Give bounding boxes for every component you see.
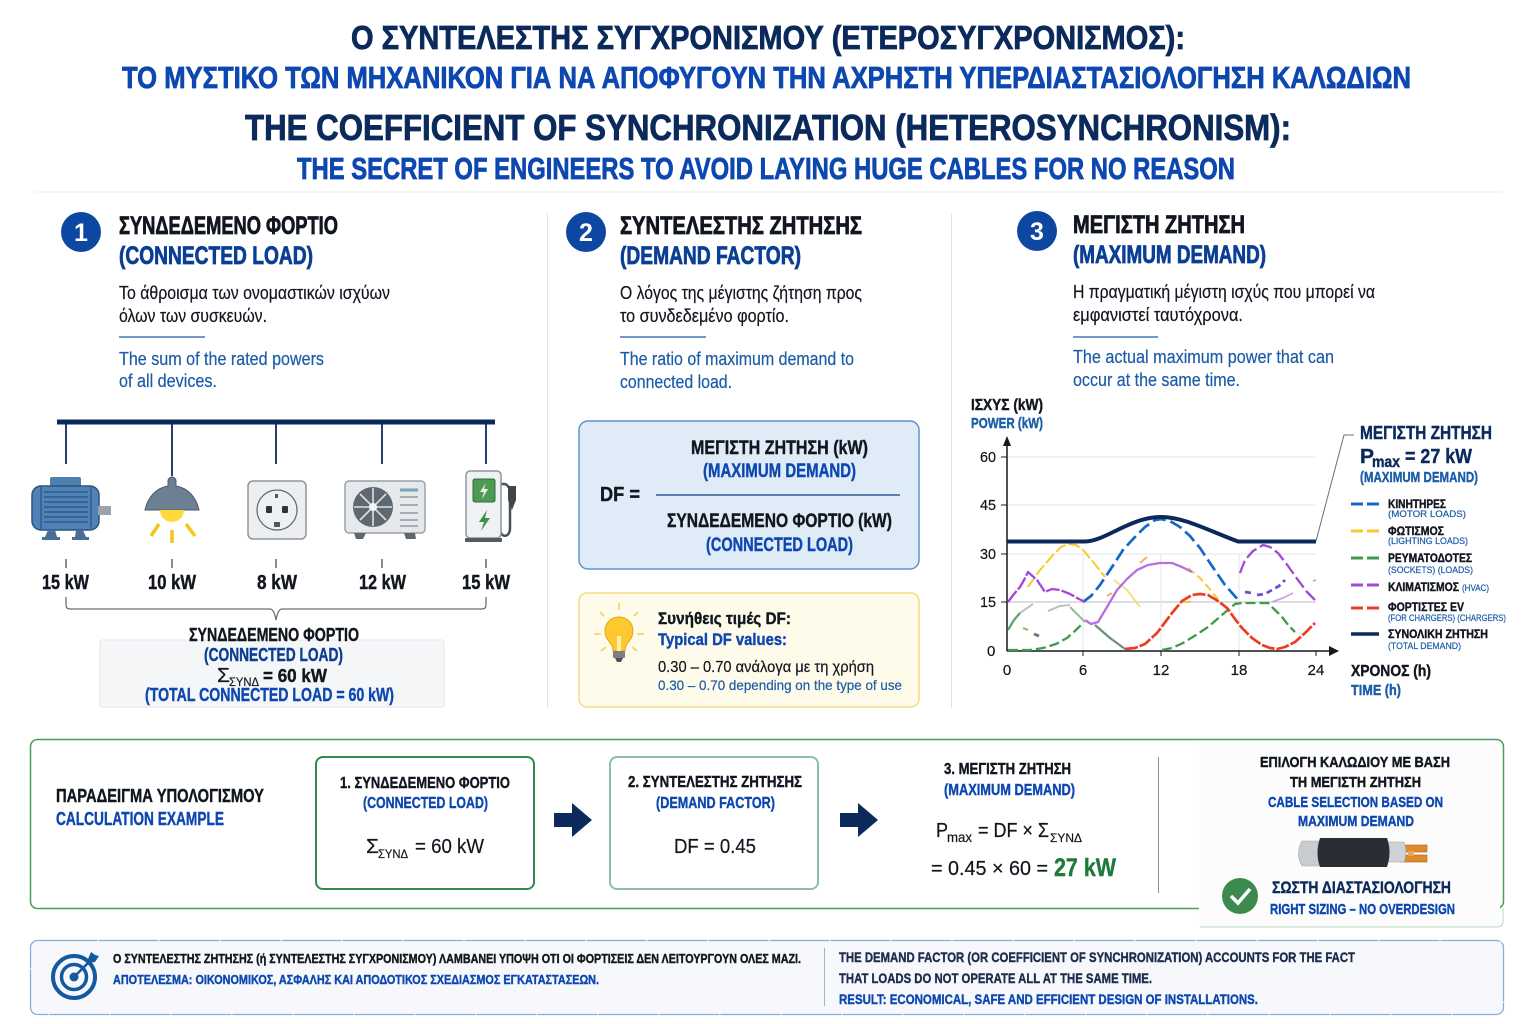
legend: total demand (1351, 627, 1488, 651)
legend: EV chargers: ΦΟΡΤΙΣΤΕΣ EV (1388, 600, 1464, 614)
calculation heading: ΠΑΡΑΔΕΙΓΜΑ ΥΠΟΛΟΓΙΣΜΟΥ (56, 786, 264, 806)
chart legend (1351, 497, 1506, 651)
series: motors (1083, 519, 1240, 602)
y axis ticks: 30 (980, 546, 996, 563)
legend: HVAC (1351, 580, 1489, 594)
icon: air conditioner (345, 481, 425, 539)
cable selection card: MAXIMUM DEMAND (1298, 813, 1414, 830)
icon: cable (1298, 838, 1427, 867)
step card: demand factor: 2. ΣΥΝΤΕΛΕΣΤΗΣ ΖΗΤΗΣΗΣ (628, 774, 802, 791)
power labels: 12 kW (359, 572, 406, 594)
description english (1073, 347, 1334, 390)
x axis title: TIME (h) (1351, 682, 1401, 699)
icon: EV charger (465, 471, 516, 542)
description english (119, 349, 324, 391)
callout: maximum demand value: (MAXIMUM DEMAND) (1360, 469, 1478, 486)
description english (620, 349, 854, 392)
legend: EV chargers (1351, 600, 1506, 623)
x axis ticks: 18 (1231, 662, 1247, 679)
formula card (579, 421, 919, 569)
panel: maximum demand (971, 211, 1506, 699)
heading: connected load: ΣΥΝΔΕΔΕΜΕΝΟ ΦΟΡΤΙΟ (119, 212, 338, 240)
cable selection card: ΤΗ ΜΕΓΙΣΤΗ ΖΗΤΗΣΗ (1290, 774, 1421, 791)
y axis title: ΙΣΧΥΣ (kW) (971, 397, 1043, 414)
description greek (119, 283, 390, 326)
y axis title (971, 397, 1043, 432)
legend: motors (1351, 497, 1466, 519)
panel: demand factor (566, 212, 919, 707)
legend: total demand: ΣΥΝΟΛΙΚΗ ΖΗΤΗΣΗ (1388, 627, 1488, 641)
step: maximum demand: P (936, 820, 948, 842)
tip card: typical values: 0.30 – 0.70 ανάλογα με τη χρήση (658, 659, 874, 676)
summary card: ΣΥΝΔ (229, 675, 259, 689)
power labels: 10 kW (148, 572, 196, 594)
summary card (100, 625, 444, 707)
series: EV chargers (1125, 594, 1315, 649)
cable selection card: CABLE SELECTION BASED ON (1268, 794, 1443, 811)
conclusion english: THE DEMAND FACTOR (OR COEFFICIENT OF SYNCHRONIZATION) ACCOUNTS FOR THE FACT (839, 949, 1355, 965)
summary card: (TOTAL CONNECTED LOAD = 60 kW) (145, 685, 394, 705)
y axis ticks: 45 (980, 497, 996, 514)
formula card: ΜΕΓΙΣΤΗ ΖΗΤΗΣΗ (kW) (691, 438, 868, 459)
summary card: ΣΥΝΔΕΔΕΜΕΝΟ ΦΟΡΤΙΟ (189, 625, 359, 645)
tip card: typical values: 0.30 – 0.70 depending on the type of use (658, 677, 902, 693)
legend: HVAC: ΚΛΙΜΑΤΙΣΜΟΣ (1388, 580, 1459, 594)
step: maximum demand: = 0.45 × 60 = (931, 858, 1048, 880)
step card: connected load: ΣΥΝΔ (378, 847, 408, 861)
description greek: Το άθροισμα των ονομαστικών ισχύων (119, 283, 390, 303)
description greek (1073, 282, 1375, 325)
cable selection card (1199, 742, 1503, 927)
tip card: typical values: Typical DF values: (658, 630, 787, 649)
x axis ticks: 24 (1308, 662, 1324, 679)
legend: motors: (MOTOR LOADS) (1388, 509, 1466, 519)
step badge 2 (566, 212, 606, 252)
panel: conclusion (30, 940, 1504, 1014)
bracket (66, 597, 486, 620)
x axis ticks: 12 (1153, 662, 1169, 679)
series: sockets (1008, 603, 1295, 650)
x axis ticks (1003, 662, 1324, 679)
calculation heading: CALCULATION EXAMPLE (56, 809, 224, 829)
title english: THE COEFFICIENT OF SYNCHRONIZATION (HETEROSYNCHRONISM): (245, 107, 1291, 148)
panel: calculation example (30, 740, 1504, 927)
tip card: typical values (579, 593, 919, 707)
legend: HVAC: (HVAC) (1462, 583, 1489, 593)
summary card: (CONNECTED LOAD) (204, 645, 343, 665)
description english: connected load. (620, 372, 732, 392)
step badge 1: 1 (74, 219, 88, 247)
legend: lighting: (LIGHTING LOADS) (1388, 536, 1468, 546)
step card: demand factor: DF = 0.45 (674, 836, 756, 858)
description english: of all devices. (119, 371, 217, 391)
step card: connected load: = 60 kW (415, 836, 484, 858)
formula card: ΣΥΝΔΕΔΕΜΕΝΟ ΦΟΡΤΙΟ (kW) (667, 511, 892, 532)
tip card: typical values: Συνήθεις τιμές DF: (658, 609, 791, 628)
step card: connected load: Σ (366, 836, 379, 858)
step card: connected load (316, 757, 534, 889)
description greek: Η πραγματική μέγιστη ισχύς που μπορεί να (1073, 282, 1375, 302)
description english: The actual maximum power that can (1073, 347, 1334, 367)
bus bar with drop lines (57, 422, 495, 476)
cable selection card: ΣΩΣΤΗ ΔΙΑΣΤΑΣΙΟΛΟΓΗΣΗ (1272, 878, 1451, 897)
legend: sockets (1351, 551, 1473, 575)
heading: demand factor: ΣΥΝΤΕΛΕΣΤΗΣ ΖΗΤΗΣΗΣ (620, 212, 862, 240)
icon: check badge (1222, 878, 1258, 914)
y axis title: POWER (kW) (971, 415, 1043, 432)
heading: maximum demand: ΜΕΓΙΣΤΗ ΖΗΤΗΣΗ (1073, 211, 1245, 239)
formula card: (CONNECTED LOAD) (706, 535, 853, 556)
summary card: Σ (217, 665, 230, 687)
description greek: Ο λόγος της μέγιστης ζήτηση προς (620, 283, 862, 303)
step card: demand factor (610, 757, 818, 889)
heading: demand factor: (DEMAND FACTOR) (620, 242, 801, 270)
icon: motor (32, 477, 111, 540)
callout: maximum demand value: = 27 kW (1405, 446, 1472, 468)
callout: maximum demand value: P (1360, 446, 1374, 468)
y axis ticks: 60 (980, 449, 996, 466)
power labels: 15 kW (462, 572, 510, 594)
axes (1001, 436, 1339, 656)
y axis ticks: 0 (987, 643, 995, 660)
power labels: 8 kW (257, 572, 297, 594)
callout: maximum demand value: ΜΕΓΙΣΤΗ ΖΗΤΗΣΗ (1360, 423, 1492, 443)
series: HVAC (1008, 545, 1316, 624)
callout leader line (1316, 435, 1354, 541)
line chart: power over time (971, 397, 1431, 699)
arrow (554, 803, 592, 837)
step badge 3 (1017, 211, 1057, 251)
step badge 1 (61, 212, 101, 252)
legend: motors: ΚΙΝΗΤΗΡΕΣ (1388, 497, 1446, 511)
formula card: DF = (600, 484, 640, 506)
legend: lighting: ΦΩΤΙΣΜΟΣ (1388, 524, 1444, 538)
heading: demand factor (620, 212, 862, 270)
conclusion greek (113, 951, 801, 987)
icon: light bulb (594, 603, 644, 662)
cable selection card: ΕΠΙΛΟΓΗ ΚΑΛΩΔΙΟΥ ΜΕ ΒΑΣΗ (1260, 754, 1450, 771)
subtitle english: THE SECRET OF ENGINEERS TO AVOID LAYING HUGE CABLES FOR NO REASON (297, 151, 1235, 186)
heading: maximum demand: (MAXIMUM DEMAND) (1073, 241, 1266, 269)
description greek: όλων των συσκευών. (119, 306, 267, 326)
description greek: εμφανιστεί ταυτόχρονα. (1073, 305, 1243, 325)
icon: socket (248, 481, 306, 539)
x axis ticks: 0 (1003, 662, 1011, 679)
step: maximum demand: = DF × Σ (978, 820, 1049, 842)
callout: maximum demand value: max (1372, 454, 1400, 471)
title block (122, 19, 1411, 186)
step: maximum demand: ΣΥΝΔ (1050, 831, 1082, 845)
legend: lighting (1351, 524, 1468, 546)
legend: total demand: (TOTAL DEMAND) (1388, 641, 1461, 651)
calculation heading (56, 786, 264, 829)
step: maximum demand (931, 761, 1116, 882)
step: maximum demand: max (947, 829, 972, 845)
conclusion greek: ΑΠΟΤΕΛΕΣΜΑ: ΟΙΚΟΝΟΜΙΚΟΣ, ΑΣΦΑΛΗΣ ΚΑΙ ΑΠΟΔΟΤΙΚΟΣ ΣΧΕΔΙΑΣΜΟΣ ΕΓΚΑΤΑΣΤΑΣΕΩΝ. (113, 972, 599, 987)
cable selection card: RIGHT SIZING – NO OVERDESIGN (1270, 901, 1455, 918)
step badge 2: 2 (579, 219, 593, 247)
y axis ticks: 15 (980, 594, 996, 611)
heading: connected load (119, 212, 338, 270)
description english: The ratio of maximum demand to (620, 349, 854, 369)
description english: occur at the same time. (1073, 370, 1240, 390)
ticks under icons (66, 559, 486, 568)
arrow (840, 803, 878, 837)
step card: connected load: 1. ΣΥΝΔΕΔΕΜΕΝΟ ΦΟΡΤΙΟ (340, 775, 510, 792)
legend: sockets: ΡΕΥΜΑΤΟΔΟΤΕΣ (1388, 551, 1472, 565)
callout: maximum demand value (1360, 423, 1492, 486)
description greek (620, 283, 862, 326)
step card: demand factor: (DEMAND FACTOR) (656, 795, 775, 812)
y axis ticks (980, 449, 996, 660)
icon: lamp (145, 477, 199, 543)
x axis title (1351, 663, 1431, 699)
legend: sockets: (SOCKETS) (LOADS) (1388, 565, 1473, 575)
step badge 3: 3 (1030, 218, 1044, 246)
step: maximum demand: (MAXIMUM DEMAND) (944, 782, 1075, 799)
step card: connected load: (CONNECTED LOAD) (363, 795, 488, 812)
heading: connected load: (CONNECTED LOAD) (119, 242, 313, 270)
x axis ticks: 6 (1079, 662, 1087, 679)
step: maximum demand: 3. ΜΕΓΙΣΤΗ ΖΗΤΗΣΗ (944, 761, 1071, 778)
legend: EV chargers: (FOR CHARGERS) (CHARGERS) (1388, 613, 1506, 623)
step: maximum demand: 27 kW (1054, 854, 1116, 882)
conclusion english (839, 949, 1355, 1007)
panel: connected load (32, 212, 516, 707)
x axis title: ΧΡΟΝΟΣ (h) (1351, 663, 1431, 680)
series: lighting (1028, 544, 1222, 607)
conclusion greek: Ο ΣΥΝΤΕΛΕΣΤΗΣ ΖΗΤΗΣΗΣ (ή ΣΥΝΤΕΛΕΣΤΗΣ ΣΥΓΧΡΟΝΙΣΜΟΥ) ΛΑΜΒΑΝΕΙ ΥΠΟΨΗ ΟΤΙ ΟΙ ΦΟΡΤΙΣΕΙΣ ΔΕΝ ΛΕΙΤΟΥΡΓΟΥΝ ΟΛΕΣ ΜΑΖΙ. (113, 951, 801, 966)
power labels (42, 572, 510, 594)
icon: target (53, 952, 99, 998)
heading: maximum demand (1073, 211, 1266, 269)
series: total demand (1007, 517, 1316, 542)
conclusion english: RESULT: ECONOMICAL, SAFE AND EFFICIENT DESIGN OF INSTALLATIONS. (839, 991, 1258, 1007)
conclusion english: THAT LOADS DO NOT OPERATE ALL AT THE SAME TIME. (839, 970, 1152, 986)
summary card: = 60 kW (263, 666, 327, 686)
title greek: Ο ΣΥΝΤΕΛΕΣΤΗΣ ΣΥΓΧΡΟΝΙΣΜΟΥ (ΕΤΕΡΟΣΥΓΧΡΟΝΙΣΜΟΣ): (351, 19, 1185, 56)
description english: The sum of the rated powers (119, 349, 324, 369)
description greek: το συνδεδεμένο φορτίο. (620, 306, 789, 326)
formula card: (MAXIMUM DEMAND) (703, 461, 856, 482)
power labels: 15 kW (42, 572, 89, 594)
